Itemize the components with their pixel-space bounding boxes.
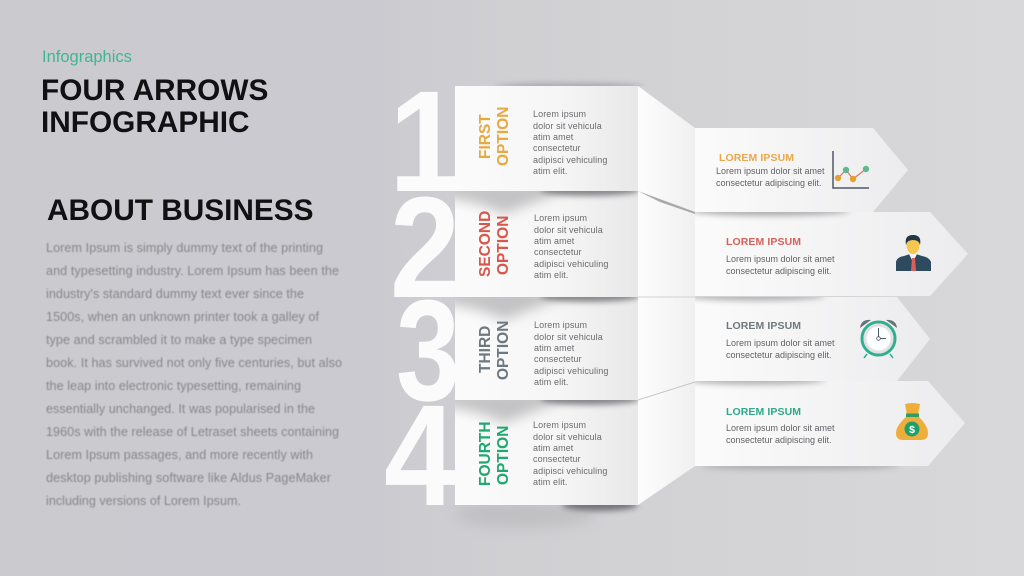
cast shadows outside panels (455, 83, 900, 528)
third option text: consectetur (534, 354, 582, 364)
second option text: Lorem ipsum (534, 213, 587, 223)
arrow 3 heading: LOREM IPSUM (726, 320, 801, 332)
second option label (477, 211, 512, 277)
icon: businessman (896, 235, 931, 271)
arrow 4 text (726, 423, 835, 445)
icon: alarm clock (860, 320, 897, 358)
body paragraph: industry's standard dummy text ever since the (46, 287, 304, 301)
arrow 2 heading: LOREM IPSUM (726, 236, 801, 248)
arrow 3 text: consectetur adipiscing elit. (726, 350, 832, 360)
body paragraph (46, 241, 342, 508)
numeral 3: 3 (396, 270, 460, 431)
body paragraph: type and scrambled it to make a type specimen (46, 333, 312, 347)
arrow 4 (685, 375, 965, 466)
arrow 4 heading: LOREM IPSUM (726, 406, 801, 418)
first option text: Lorem ipsum (533, 109, 586, 119)
arrow 4 text: consectetur adipiscing elit. (726, 435, 832, 445)
fourth option text: atim elit. (533, 477, 568, 487)
first option text: atim elit. (533, 166, 568, 176)
body paragraph: including versions of Lorem Ipsum. (46, 494, 241, 508)
third option label (477, 321, 512, 380)
fourth option label: OPTION (495, 426, 512, 485)
panel: fourth option (455, 400, 638, 505)
body paragraph: 1500s, when an unknown printer took a galley of (46, 310, 320, 324)
third option text: adipisci vehiculing (534, 366, 608, 376)
big numerals (384, 61, 462, 536)
first option text: atim amet (533, 132, 574, 142)
fourth option label (477, 421, 512, 486)
body paragraph: essentially unchanged. It was popularised in the (46, 402, 315, 416)
first option label: FIRST (477, 114, 494, 159)
first option label (477, 107, 512, 166)
second option text (534, 213, 608, 280)
first option text: adipisci vehiculing (533, 155, 607, 165)
arrow 3 text (726, 338, 835, 360)
arrow 1 text: consectetur adipiscing elit. (716, 178, 822, 188)
body paragraph: and typesetting industry. Lorem Ipsum has been the (46, 264, 339, 278)
arrow 1 heading: LOREM IPSUM (719, 152, 794, 164)
body paragraph: 1960s with the release of Letraset sheets containing (46, 425, 339, 439)
arrow 1 text: Lorem ipsum dolor sit amet (716, 166, 825, 176)
fourth option text: adipisci vehiculing (533, 466, 607, 476)
numeral 2: 2 (390, 167, 460, 328)
body paragraph: Lorem Ipsum is simply dummy text of the printing (46, 241, 323, 255)
connector folds (638, 86, 695, 505)
fourth option text: atim amet (533, 443, 574, 453)
arrow 2 (690, 206, 968, 296)
title: INFOGRAPHIC (41, 106, 250, 139)
third option label: THIRD (477, 326, 494, 373)
second option text: atim elit. (534, 270, 569, 280)
second option text: dolor sit vehicula (534, 225, 603, 235)
arrow 4 text: Lorem ipsum dolor sit amet (726, 423, 835, 433)
second option text: adipisci vehiculing (534, 259, 608, 269)
icon: money bag: $ (909, 424, 915, 436)
arrow 3 (695, 297, 930, 381)
panel: third option (455, 297, 638, 400)
arrow 1 (695, 128, 908, 212)
body paragraph: book. It has survived not only five centuries, but also (46, 356, 342, 370)
third option text: atim elit. (534, 377, 569, 387)
third option text (534, 320, 608, 387)
numeral 4: 4 (384, 375, 456, 536)
section heading: ABOUT BUSINESS (47, 194, 314, 227)
second option label: OPTION (495, 216, 512, 275)
fourth option text: Lorem ipsum (533, 420, 586, 430)
second option label: SECOND (477, 211, 494, 277)
third option text: atim amet (534, 343, 575, 353)
title (41, 74, 268, 139)
panel: second option (455, 191, 638, 297)
body paragraph: desktop publishing software like Aldus PageMaker (46, 471, 331, 485)
body paragraph: the leap into electronic typesetting, remaining (46, 379, 301, 393)
fourth option text: dolor sit vehicula (533, 432, 602, 442)
second option text: atim amet (534, 236, 575, 246)
third option text: dolor sit vehicula (534, 332, 603, 342)
first option label: OPTION (495, 107, 512, 166)
fourth option text: consectetur (533, 454, 581, 464)
arrow 3 text: Lorem ipsum dolor sit amet (726, 338, 835, 348)
third option text: Lorem ipsum (534, 320, 587, 330)
arrow 2 text: Lorem ipsum dolor sit amet (726, 254, 835, 264)
icon: money bag (896, 403, 928, 440)
first option text: dolor sit vehicula (533, 121, 602, 131)
fourth option text (533, 420, 607, 487)
arrow 2 text: consectetur adipiscing elit. (726, 266, 832, 276)
icon: line chart (833, 151, 869, 188)
arrow 2 text (726, 254, 835, 276)
arrow 1 text (716, 166, 825, 188)
second option text: consectetur (534, 247, 582, 257)
body paragraph: Lorem Ipsum passages, and more recently with (46, 448, 313, 462)
first option text (533, 109, 607, 176)
subtitle: Infographics (42, 48, 132, 66)
third option label: OPTION (495, 321, 512, 380)
title: FOUR ARROWS (41, 74, 268, 107)
numeral 1: 1 (389, 61, 462, 222)
first option text: consectetur (533, 143, 581, 153)
fourth option label: FOURTH (477, 421, 494, 486)
panel: first option (455, 86, 638, 191)
